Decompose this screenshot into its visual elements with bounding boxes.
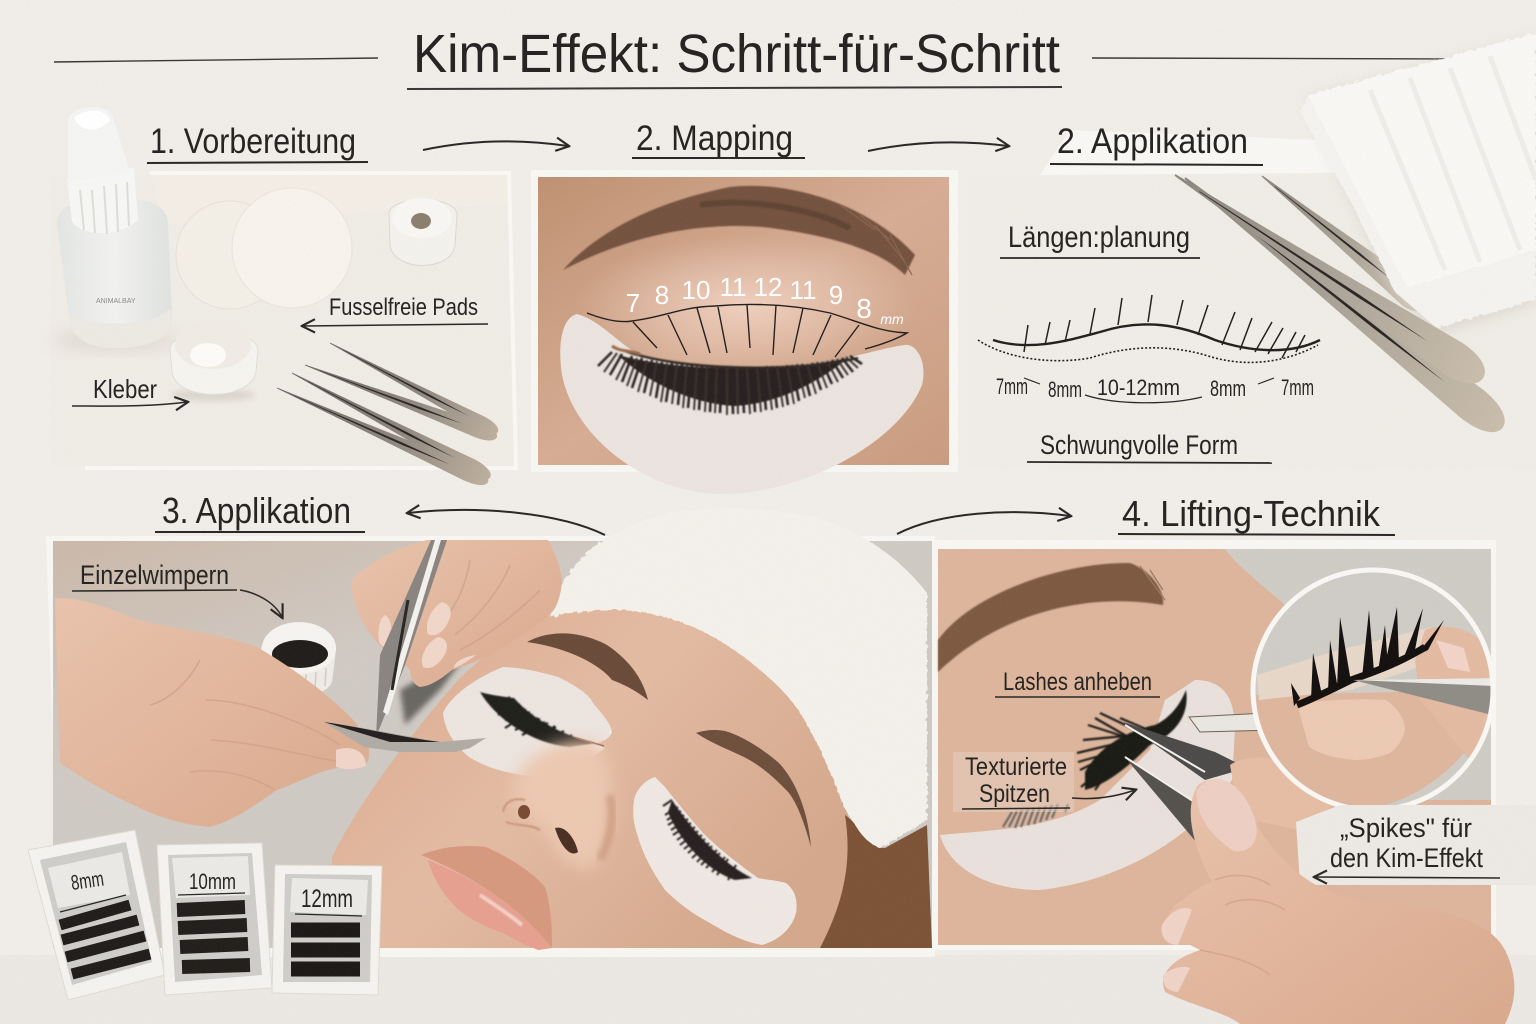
front tweezers [1165,160,1514,442]
towel backdrop [53,541,932,948]
lash tray: 10mm [157,843,272,995]
length scale labels [996,374,1314,403]
arrow: step 2 to 3 [868,142,1008,151]
skin [938,549,1491,945]
mapping numbers: 7 [626,288,640,318]
skin photo [538,177,949,465]
lash tray: 12mm: 12mm [301,885,353,913]
panel backdrop [50,176,514,466]
length scale labels: 8mm [1048,377,1082,402]
tweezers [324,540,486,752]
spray bottle [53,107,177,350]
under-eye patch [940,680,1235,890]
callout plate: Spikes: den Kim-Effekt [1330,843,1483,873]
towel [150,176,507,224]
eyebrow [938,563,1165,672]
shadow between hand and face [400,650,470,725]
mapping numbers: 11 [790,275,816,305]
label: Texturierte Spitzen: Texturierte [965,753,1067,781]
mapping numbers: 8 [856,293,872,324]
panel 1: Vorbereitung [50,107,516,490]
mapping grid [587,304,907,357]
left lashes [480,692,596,747]
label: Kleber [72,374,187,406]
arrow: step 4 curved right [897,512,1070,534]
mapping numbers: 10 [682,275,710,305]
label: Schwungvolle Form: Schwungvolle Form [1040,430,1238,460]
left eye patch [443,667,612,777]
label: Texturierte Spitzen [953,752,1135,812]
lash tray: 12mm [272,865,382,995]
towel [1300,33,1536,332]
photo frame [531,170,958,472]
heading: 2. Applikation: 2. Applikation [1057,122,1248,161]
label: Texturierte Spitzen: Spitzen [979,780,1050,808]
knuckle creases [1200,875,1285,975]
right lashes [663,800,752,880]
label: Fusselfreie Pads: Fusselfreie Pads [329,294,478,321]
small silver tweezers [1189,713,1274,732]
glue cup [261,622,336,695]
lash tray: 10mm: 10mm [189,869,236,894]
mapping numbers: 12 [754,272,782,302]
arrow: step 3 curved left [408,510,605,535]
length scale labels: 8mm [1210,376,1246,401]
lash tray: 8mm: 8mm [69,868,105,895]
panel 5: Lifting-Technik photo [934,540,1496,950]
lashes [598,346,862,415]
right hand [352,540,562,687]
spike lashes [1291,607,1444,706]
hand holding tweezers [1162,779,1514,1024]
label: Kleber: Kleber [93,374,157,404]
label: Einzelwimpern: Einzelwimpern [80,560,229,590]
panel 3: Längenplanung [968,33,1536,468]
circular detail inset [1253,570,1494,810]
frame [46,536,935,957]
title [54,24,1481,89]
left hand [55,598,369,827]
fingernails [378,602,476,668]
thumb nail [1197,779,1257,851]
heading: 1. Vorbereitung: 1. Vorbereitung [150,122,356,161]
heading: 4. Lifting-Technik: 4. Lifting-Technik [1122,493,1381,534]
panel 2: Mapping [531,170,958,494]
main tweezers [1123,722,1247,843]
right brow [696,730,811,847]
length scale labels: 10-12mm [1097,375,1180,400]
frame lines [85,173,516,468]
lash tray: 8mm [28,830,165,1000]
under-eye patch [560,314,924,494]
panel 4: Applikation photo [46,508,935,957]
panel backdrop [968,176,1536,468]
tweezers [274,337,501,490]
callout plate: Spikes: „Spikes" für [1340,813,1472,843]
length scale labels: 7mm [1281,375,1314,400]
grey background [1225,549,1491,800]
right eye patch [633,777,797,945]
label: Lashes anheben: Lashes anheben [1003,668,1152,696]
glue jar [170,321,258,401]
spray bottle: ANIMALBAY [96,298,136,305]
left brow [527,633,648,700]
arrow: step 1 to 2 [423,141,568,150]
face [332,609,860,948]
lower nails [1162,908,1192,992]
mapping numbers: mm [880,311,904,327]
label: Längenplanung: Längen:planung [1008,221,1190,254]
length scale labels: 7mm [996,374,1028,399]
mapping numbers [626,272,904,327]
white cap [389,198,457,266]
lips [421,846,552,950]
hair [820,815,932,948]
heading: 2. Mapping: 2. Mapping [636,119,793,158]
white band [1040,130,1335,175]
lint free pads [176,188,352,309]
headband towel [551,508,927,848]
frame [934,540,1496,950]
lash diagram [978,295,1320,362]
rear tweezers [1254,166,1434,318]
lashes [1003,690,1187,828]
eyebrow [563,186,915,275]
heading: 3. Applikation: 3. Applikation [162,490,351,531]
rear finger [1230,757,1340,830]
title: Kim-Effekt: Schritt-für-Schritt [413,24,1060,84]
mapping numbers: 9 [829,280,843,310]
eyelid highlight [575,235,915,375]
label: Einzelwimpern [72,560,282,617]
nose [503,741,613,868]
mapping numbers: 11 [720,272,746,302]
callout plate: Spikes [1296,805,1536,885]
mapping numbers: 8 [655,280,669,310]
